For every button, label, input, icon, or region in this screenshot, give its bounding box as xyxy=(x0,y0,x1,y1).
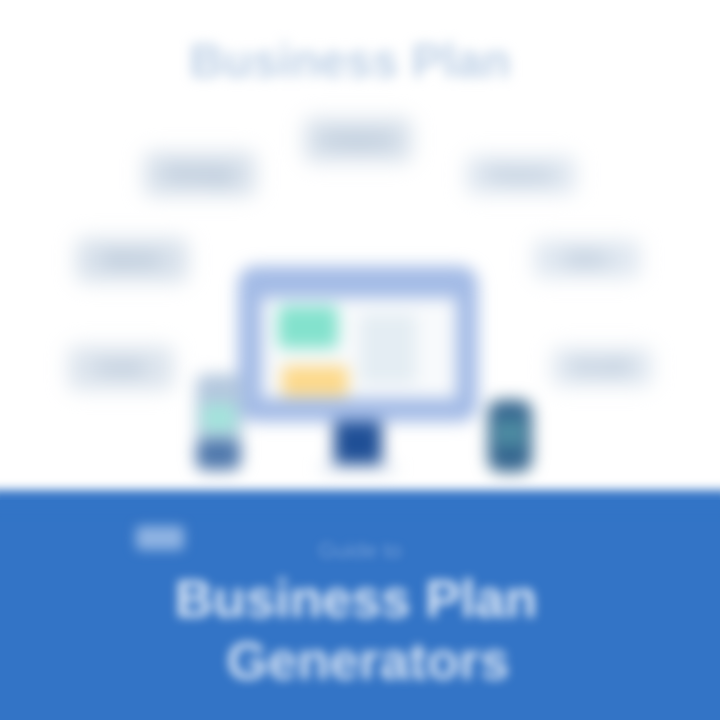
logo mark xyxy=(136,526,184,550)
label: middle right xyxy=(534,240,640,278)
label: lower left: Goals xyxy=(97,358,145,377)
monitor stand xyxy=(320,422,396,472)
label: middle left xyxy=(76,238,188,282)
label: top centre xyxy=(304,118,412,162)
label: lower left xyxy=(68,346,174,390)
phone left xyxy=(196,374,242,470)
heading line one: Business Plan xyxy=(175,570,537,629)
heading line two: Generators xyxy=(227,632,509,691)
title: Business Plan xyxy=(189,34,511,87)
bottom banner xyxy=(0,500,720,720)
label: upper left: Strategy xyxy=(166,164,234,183)
label: upper left xyxy=(144,152,256,196)
eyebrow text: Guide to xyxy=(318,538,402,563)
dashboard tiles xyxy=(278,306,416,396)
phone right xyxy=(488,400,532,472)
label: upper right: Finance xyxy=(489,165,553,184)
label: upper right xyxy=(466,156,576,194)
label: lower right xyxy=(552,348,652,386)
monitor frame xyxy=(238,266,478,422)
label: top centre: Analysis xyxy=(323,130,393,149)
label: middle left: Market xyxy=(105,250,159,269)
label: lower right: Growth xyxy=(572,357,632,376)
label: middle right: Sales xyxy=(565,249,609,268)
top edge highlight xyxy=(0,490,720,510)
